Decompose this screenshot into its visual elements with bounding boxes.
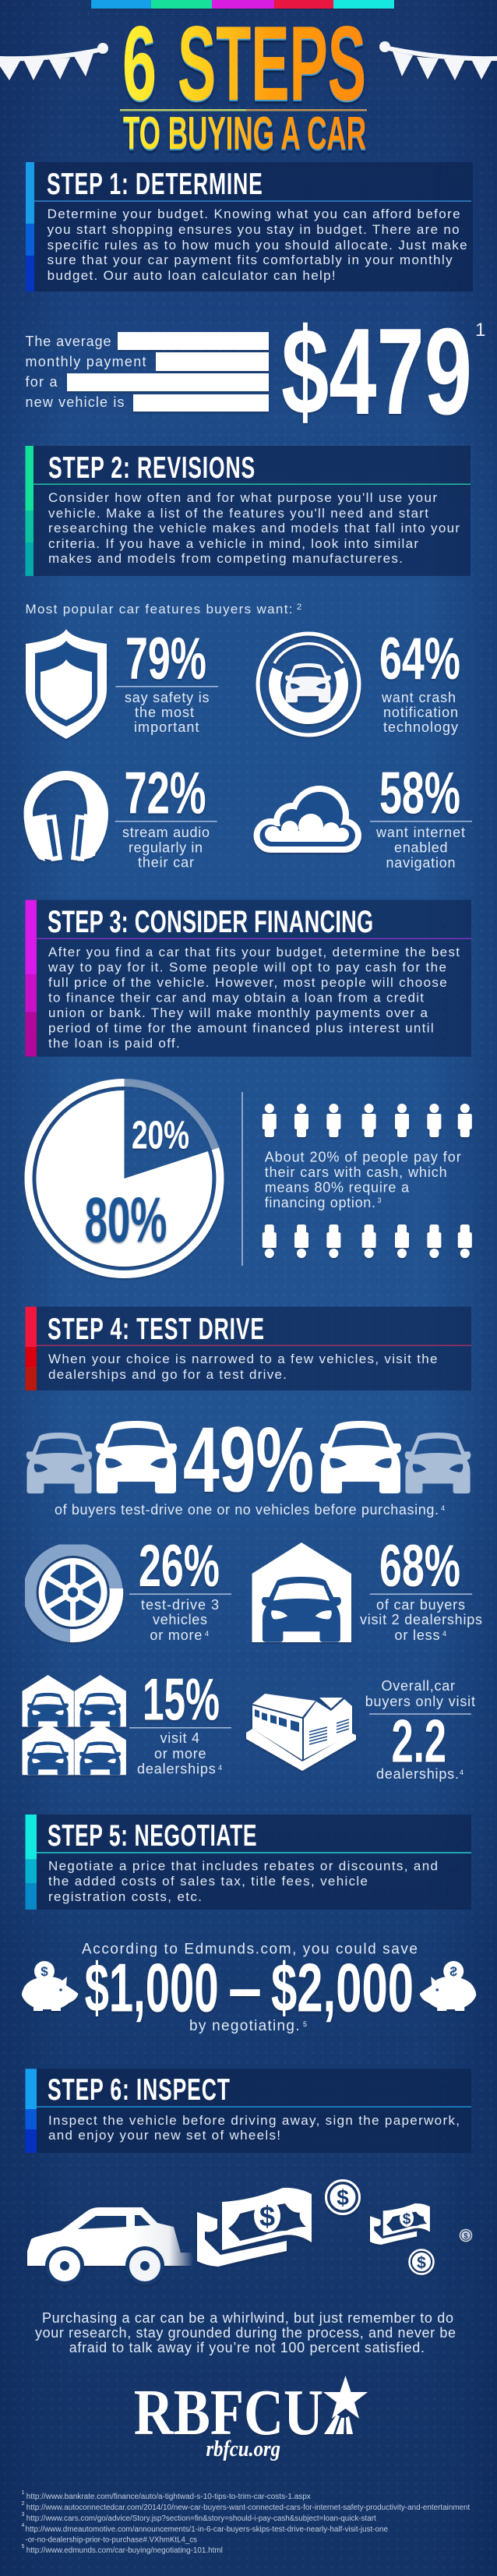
text: step 3 body: After you find a car that fits your budget, determine the best — [48, 945, 460, 959]
text: rbfcu.org: rbfcu.org — [206, 2436, 280, 2461]
icon: small banknote: $ — [403, 2211, 411, 2228]
heading: step 6: STEP 6: INSPECT — [48, 2073, 230, 2107]
stat: 68%: 4 — [442, 1630, 446, 1638]
footnotes: 1 — [22, 2490, 25, 2496]
text: by negotiating: by negotiating. — [189, 2018, 299, 2034]
stat: 72% audio: their car — [138, 854, 194, 870]
stat: 15%: or more — [154, 1746, 206, 1762]
stat: 26%: test-drive 3 — [141, 1597, 219, 1613]
footnotes: http://www.cars.com/go/advice/Story.jsp?section=fin&story=should-i-pay-cash&subject=loan-quick-start — [26, 2514, 376, 2523]
text: step 3 body: full price of the vehicle. However, most people will choose — [48, 975, 447, 990]
footnotes: http://www.autoconnectedcar.com/2014/10/new-car-buyers-want-connected-cars-for-internet-safety-productivity-and-entertainment — [26, 2504, 471, 2512]
panel: step 1 — [26, 162, 473, 292]
text: closing: your research, stay grounded during the process, and never be — [35, 2325, 456, 2341]
stat: 2.2 dealerships: buyers only visit — [365, 1694, 475, 1709]
stat: 15%: 4 — [218, 1764, 222, 1772]
stat: 58% navigation: navigation — [386, 855, 455, 871]
text: step 4 body: dealerships and go for a test drive. — [48, 1367, 287, 1382]
icon: large banknote: $ — [259, 2200, 275, 2232]
stat: average monthly payment — [25, 303, 485, 440]
title — [120, 4, 367, 159]
text: step 2 body — [48, 490, 460, 566]
text: closing: Purchasing a car can be a whirlwind, but just remember to do — [42, 2310, 453, 2326]
text: closing — [35, 2310, 456, 2355]
divider — [241, 1092, 243, 1266]
title line: 6 STEPS: 6 — [122, 4, 157, 122]
heading: popular features: Most popular car features buyers want: — [25, 602, 293, 617]
stat: savings — [22, 1941, 476, 2034]
icon: right large car — [320, 1421, 401, 1493]
icon: right small car — [405, 1433, 471, 1493]
panel: step 4 — [25, 1306, 471, 1390]
stat: 68%: visit 2 dealerships — [360, 1612, 482, 1627]
text: financing note: About 20% of people pay for — [265, 1150, 461, 1165]
icon: departing car — [27, 2207, 193, 2285]
number: savings range: $2,000 — [271, 1949, 414, 2027]
footnotes: http://www.dmeautomotive.com/announcements/1-in-6-car-buyers-skips-test-drive-nearly-half-visit-just-one — [25, 2525, 388, 2534]
stat: 58% navigation: 58% — [379, 761, 460, 826]
stat: 58% navigation: want internet — [375, 825, 465, 840]
text: step 2 body: criteria. If you have a vehicle in mind, look into similar — [48, 536, 418, 551]
icon: headphones — [23, 771, 108, 861]
heading: step 5: STEP 5: NEGOTIATE — [48, 1819, 257, 1853]
stat: 79% safety — [115, 626, 218, 735]
text: closing: afraid to talk away if you’re not 100 percent satisfied. — [69, 2340, 425, 2355]
text: 49% caption: of buyers test-drive one or no vehicles before purchasing. — [55, 1502, 439, 1518]
stat: 64% crash: 64% — [379, 626, 460, 692]
heading: step 1: STEP 1: DETERMINE — [47, 168, 263, 201]
icon: four garages — [22, 1675, 126, 1775]
text: payment label: new vehicle is — [25, 394, 125, 410]
text: by negotiating: 5 — [303, 2020, 307, 2028]
stat: 68% — [360, 1533, 482, 1643]
icon: small coin — [460, 2229, 472, 2242]
panel: step 2 — [25, 446, 471, 576]
footnote marker 1: 1 — [475, 320, 485, 341]
number: savings range: – — [228, 1949, 262, 2027]
icon: large coin — [326, 2181, 360, 2214]
footnotes: http://www.bankrate.com/finance/auto/a-tightwad-s-10-tips-to-trim-car-costs-1.aspx — [26, 2493, 311, 2501]
text: step 3 body — [48, 945, 460, 1051]
text: payment label: for a — [25, 374, 58, 390]
footnotes: 3 — [22, 2512, 25, 2518]
number: savings range: $1,000 — [85, 1949, 219, 2027]
number: savings range — [85, 1949, 414, 2027]
stat: 79% safety: important — [134, 719, 199, 735]
stat: 15%: visit 4 — [160, 1730, 199, 1746]
icon: medium coin — [410, 2249, 433, 2274]
top colour bar — [91, 0, 394, 9]
footnotes: 5 — [22, 2544, 25, 2549]
text: step 1 body: budget. Our auto loan calculator can help! — [48, 268, 336, 283]
icon: large banknote — [197, 2188, 312, 2267]
stat: 15%: 15% — [143, 1666, 220, 1733]
icon: dealership building — [246, 1694, 356, 1771]
text: financing note — [265, 1150, 461, 1210]
icon: wheel — [30, 1549, 123, 1642]
stat: 68%: 68% — [379, 1533, 460, 1599]
text: step 1 body: sure that your car payment fits comfortably in your monthly — [48, 253, 453, 267]
footnotes: http://www.edmunds.com/car-buying/negotiating-101.html — [26, 2546, 223, 2555]
text: step 2 body: Consider how often and for what purpose you'll use your — [48, 490, 437, 505]
stat: 79% safety: 79% — [125, 626, 206, 692]
stat: 72% audio — [115, 761, 217, 870]
icon: shield — [26, 629, 107, 739]
stat: 2.2 dealerships: dealerships. — [376, 1766, 459, 1782]
stat: 58% navigation: enabled — [394, 840, 447, 856]
text: step 3 body: union or bank. They will make monthly payments over a — [48, 1005, 428, 1020]
text: payment label — [25, 334, 146, 410]
icon: left piggy bank: $ — [41, 1964, 48, 1979]
panel: step 5 — [25, 1815, 471, 1910]
text: financing note: financing option. — [265, 1195, 375, 1210]
stat: 15%: dealerships — [137, 1761, 216, 1776]
stat: 49% test drive — [26, 1408, 471, 1518]
stat: 72% audio: 72% — [125, 761, 206, 826]
text: financing note: means 80% require a — [265, 1180, 410, 1196]
stat: 72% audio: stream audio — [122, 825, 210, 840]
text: step 6 body — [48, 2113, 460, 2143]
icon: large coin: $ — [337, 2186, 349, 2210]
text: step 4 body — [48, 1352, 438, 1382]
text: step 3 body: period of time for the amount financed plus interest until — [48, 1021, 434, 1036]
text: financing note: their cars with cash, which — [265, 1164, 447, 1180]
icon: medium coin: $ — [417, 2254, 426, 2272]
logo: RBFCU: RBFCU — [134, 2376, 323, 2449]
text: step 5 body — [48, 1859, 438, 1904]
text: step 6 body: and enjoy your new set of wheels! — [48, 2128, 280, 2143]
text: payment label: The average — [25, 334, 111, 349]
stat: 2.2 dealerships: 2.2 — [391, 1706, 446, 1775]
icon: left small car — [26, 1433, 92, 1493]
stat: 58% navigation — [370, 761, 472, 871]
icon: right bunting — [379, 41, 497, 80]
icon: crash notification — [258, 634, 359, 735]
white bars — [67, 332, 269, 412]
stat: 79% safety: say safety is — [125, 690, 209, 705]
icon: left large car — [96, 1421, 177, 1493]
text: step 1 body — [48, 207, 467, 283]
footnotes: 2 — [22, 2501, 25, 2507]
heading: step 3: STEP 3: CONSIDER FINANCING — [48, 905, 373, 939]
text: payment label: monthly payment — [25, 354, 146, 369]
stat: 72% audio: regularly in — [129, 840, 203, 856]
title line: 6 STEPS — [122, 4, 366, 122]
stat: 26%: 26% — [139, 1533, 220, 1599]
pie ring — [24, 1079, 224, 1278]
stat: 68%: of car buyers — [376, 1597, 465, 1613]
text: step 5 body: registration costs, etc. — [48, 1889, 202, 1904]
text: step 2 body: researching the vehicle makes and models that fall into your — [48, 521, 460, 535]
stat: 64% crash: notification — [383, 705, 458, 720]
text: step 4 body: When your choice is narrowed to a few vehicles, visit the — [48, 1352, 438, 1366]
text: step 3 body: way to pay for it. Some people will opt to pay cash for the — [48, 960, 446, 975]
footnotes — [22, 2490, 471, 2555]
icon: logo star — [323, 2376, 368, 2434]
icon: right piggy bank — [420, 1961, 476, 2011]
text: step 1 body: Determine your budget. Knowing what you can afford before — [48, 207, 460, 221]
stat: 64% crash: want crash — [381, 690, 456, 705]
footnotes: 4 — [22, 2523, 25, 2528]
icon: cloud — [254, 786, 361, 853]
footnotes: -or-no-dealership-prior-to-purchase#.VXhmKtL4_cs — [25, 2536, 197, 2544]
icon: left piggy bank — [22, 1961, 78, 2011]
title rule — [120, 109, 367, 111]
text: step 3 body: to finance their car and may obtain a loan from a credit — [48, 991, 424, 1005]
stat: 2.2 dealerships: Overall,car — [382, 1678, 455, 1694]
stat: 15% — [129, 1666, 231, 1776]
label 20%: 20% — [132, 1113, 189, 1157]
stat: 26%: vehicles — [153, 1612, 207, 1627]
text: step 3 body: the loan is paid off. — [48, 1036, 180, 1051]
text: step 5 body: Negotiate a price that includes rebates or discounts, and — [48, 1859, 438, 1874]
icon row: people top — [263, 1104, 472, 1137]
icon: garage — [252, 1542, 351, 1642]
heading: popular features: 2 — [297, 602, 301, 612]
text: step 6 body: Inspect the vehicle before driving away, sign the paperwork, — [48, 2113, 460, 2128]
text: 49% caption: 4 — [441, 1504, 445, 1512]
text: step 2 body: vehicle. Make a list of the features you'll need and start — [48, 506, 428, 521]
text: financing note: 3 — [377, 1196, 382, 1204]
label 80%: 80% — [85, 1185, 167, 1256]
number: 49%: 49% — [183, 1408, 314, 1512]
stat: 2.2 dealerships — [365, 1678, 475, 1782]
stat: 79% safety: the most — [135, 705, 194, 720]
text: edmunds lead-in: According to Edmunds.com, you could save — [82, 1941, 418, 1958]
stat: 64% crash: technology — [383, 719, 458, 735]
stat: 2.2 dealerships: 4 — [460, 1769, 464, 1776]
icon: small coin: $ — [464, 2232, 468, 2241]
heading: step 2: STEP 2: REVISIONS — [48, 451, 255, 485]
panel: step 3 — [25, 900, 471, 1057]
icon: right piggy bank: $ — [449, 1964, 457, 1979]
panel: step 6 — [25, 2069, 471, 2153]
heading: step 4: STEP 4: TEST DRIVE — [48, 1313, 264, 1346]
icon row: people bottom — [263, 1224, 472, 1258]
stat: 26%: or more — [150, 1627, 202, 1643]
stat: 26% — [129, 1533, 231, 1643]
icon: small banknote — [370, 2203, 430, 2245]
text: step 5 body: the added costs of sales tax, title fees, vehicle — [48, 1874, 368, 1889]
stat: 68%: or less — [394, 1627, 439, 1643]
text: step 2 body: makes and models from competing manufactureres. — [48, 551, 403, 566]
stat: 26%: 4 — [205, 1630, 209, 1638]
stat: 64% crash — [379, 626, 460, 735]
text: step 1 body: you start shopping ensures you stay in budget. There are no — [48, 222, 460, 237]
chart: 20/80 pie — [24, 1079, 224, 1278]
icon: left bunting — [0, 43, 108, 80]
text: step 1 body: specific rules as to how much you should allocate. Just make — [48, 238, 467, 253]
